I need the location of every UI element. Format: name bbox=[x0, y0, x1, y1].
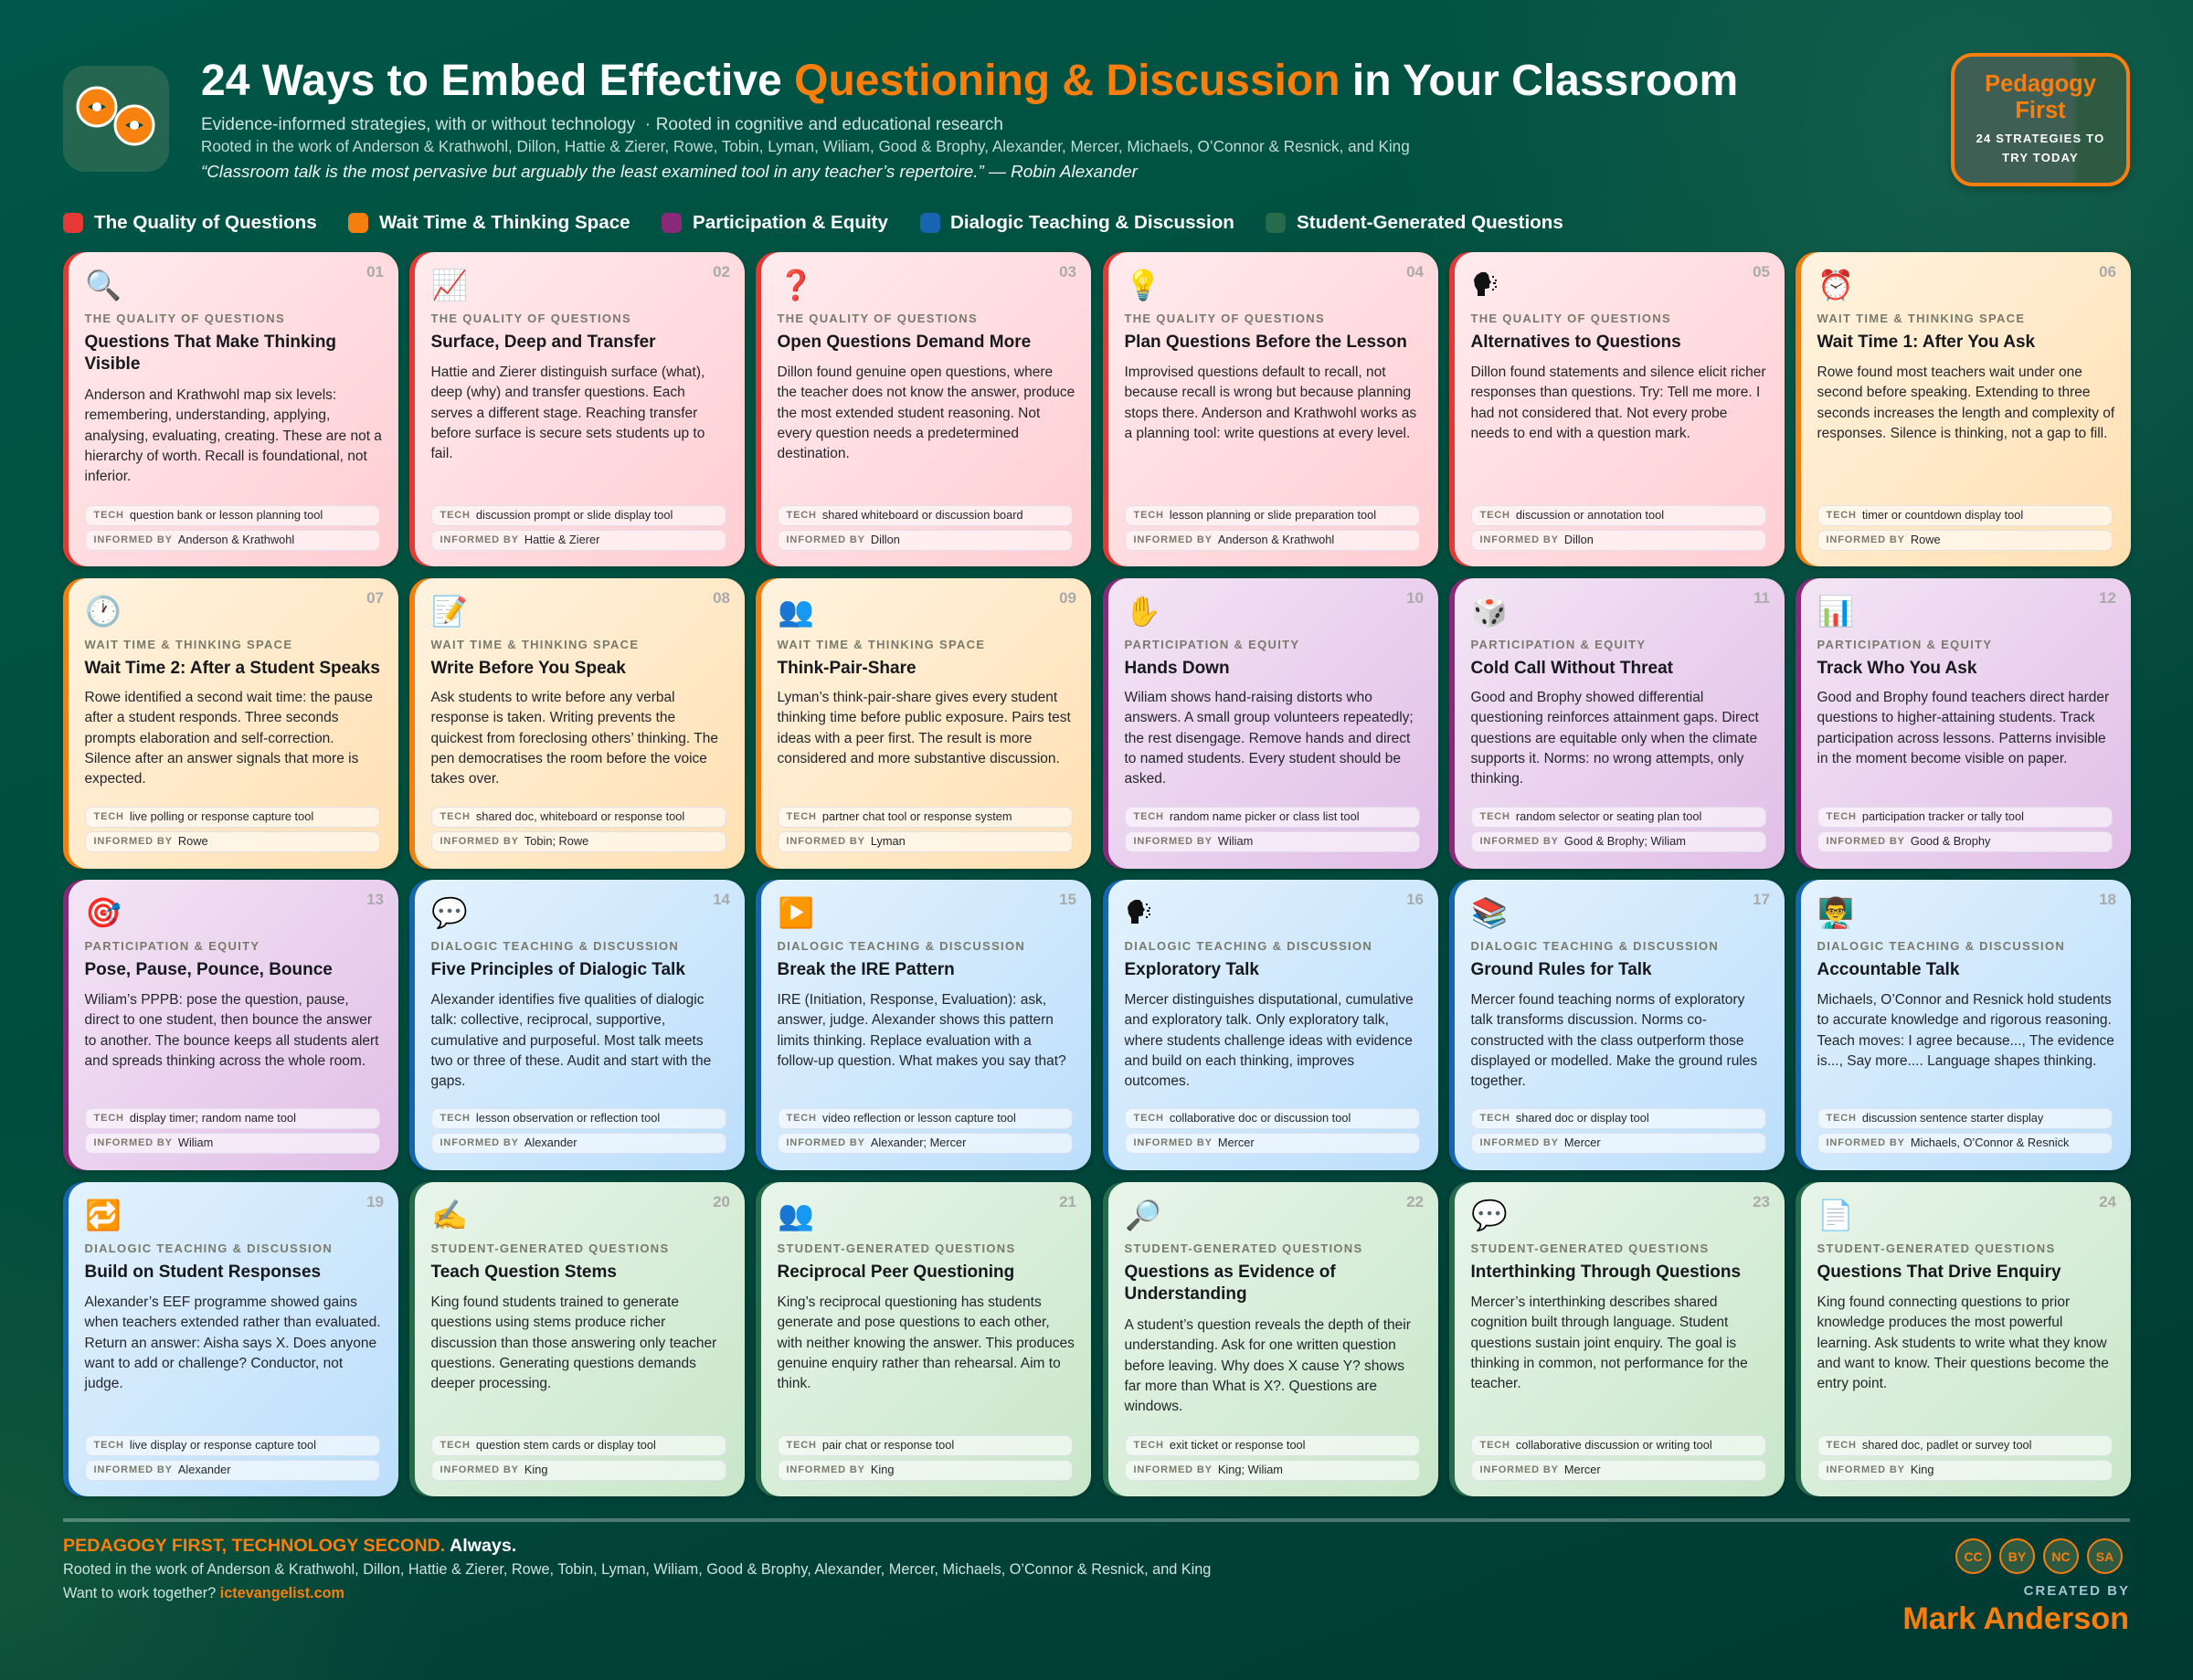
informed by pill bbox=[1817, 831, 2113, 852]
card body: Mercer found teaching norms of exploratory talk transforms discussion. Norms co-constructed with the class outperform those displayed or modelled. Make the ground rules together. bbox=[1471, 992, 1757, 1089]
informed by pill bbox=[777, 1460, 1073, 1481]
informed by pill: INFORMED BY Alexander; Mercer bbox=[786, 1136, 966, 1149]
category: DIALOGIC TEACHING & DISCUSSION bbox=[84, 1242, 333, 1255]
category: THE QUALITY OF QUESTIONS bbox=[777, 312, 978, 325]
informed by pill bbox=[1817, 530, 2113, 551]
card title: Break the IRE Pattern bbox=[777, 960, 955, 979]
subtitle: Evidence-informed strategies, with or without technology · Rooted in cognitive and educational research bbox=[201, 115, 1003, 134]
tech pill: TECH discussion or annotation tool bbox=[1480, 508, 1664, 522]
informed by pill: INFORMED BY King bbox=[440, 1463, 547, 1476]
category: DIALOGIC TEACHING & DISCUSSION bbox=[777, 939, 1025, 953]
informed by pill: INFORMED BY Michaels, O’Connor & Resnick bbox=[1826, 1136, 2069, 1149]
category: THE QUALITY OF QUESTIONS bbox=[1471, 312, 1671, 325]
logo icon: two orange eyes bbox=[63, 66, 169, 172]
card 23 bbox=[1449, 1182, 1785, 1496]
footer tagline: PEDAGOGY FIRST, TECHNOLOGY SECOND. Always. bbox=[63, 1536, 516, 1556]
card body: King’s reciprocal questioning has students generate and pose questions to each other, with neither knowing the answer. This produces genuine enquiry rather than rehearsal. Aim to think. bbox=[777, 1294, 1075, 1391]
number: 12 bbox=[2099, 589, 2116, 607]
tech pill: TECH shared doc, whiteboard or response tool bbox=[440, 809, 684, 823]
informed by pill bbox=[84, 831, 380, 852]
card body: Dillon found statements and silence elicit richer responses than questions. Try: Tell me more. I had not considered that. Not every probe needs to end with a question mark. bbox=[1471, 365, 1766, 441]
tech pill bbox=[431, 1108, 726, 1129]
tech pill: TECH display timer; random name tool bbox=[93, 1111, 296, 1125]
tech pill: TECH shared doc or display tool bbox=[1480, 1111, 1649, 1125]
number: 04 bbox=[1406, 263, 1424, 280]
category: WAIT TIME & THINKING SPACE bbox=[1817, 312, 2025, 325]
footer attribution: Rooted in the work of Anderson & Krathwohl, Dillon, Hattie & Zierer, Rowe, Tobin, Lyman, Wiliam, Good & Brophy, Alexander, Mercer, Michaels, O’Connor & Resnick, and King bbox=[63, 1561, 1211, 1578]
number: 22 bbox=[1406, 1193, 1424, 1210]
card title: Write Before You Speak bbox=[431, 659, 626, 678]
tech pill: TECH lesson observation or reflection tool bbox=[440, 1111, 660, 1125]
card title: Surface, Deep and Transfer bbox=[431, 333, 656, 352]
tech pill: TECH video reflection or lesson capture tool bbox=[786, 1111, 1016, 1125]
number: 17 bbox=[1753, 891, 1770, 908]
quote: “Classroom talk is the most pervasive but arguably the least examined tool in any teacher’s repertoire.” — Robin Alexander bbox=[201, 162, 1138, 181]
category: WAIT TIME & THINKING SPACE bbox=[777, 638, 985, 651]
card body: IRE (Initiation, Response, Evaluation): ask, answer, judge. Alexander shows this pattern limits thinking. Replace evaluation with a follow-up question. What makes you say that? bbox=[777, 992, 1066, 1069]
tech pill: TECH partner chat tool or response system bbox=[786, 809, 1012, 823]
category: THE QUALITY OF QUESTIONS bbox=[1124, 312, 1325, 325]
category: STUDENT-GENERATED QUESTIONS bbox=[431, 1242, 669, 1255]
card title: Build on Student Responses bbox=[84, 1263, 321, 1282]
card body: Wiliam’s PPPB: pose the question, pause, direct to one student, then bounce the answer to another. The bounce keeps all students alert and spreads thinking across the whole room. bbox=[84, 992, 378, 1069]
card title: Cold Call Without Threat bbox=[1471, 659, 1673, 678]
card title: Exploratory Talk bbox=[1124, 960, 1259, 979]
category: DIALOGIC TEACHING & DISCUSSION bbox=[1471, 939, 1719, 953]
informed by pill: INFORMED BY Rowe bbox=[1826, 533, 1941, 546]
informed by pill bbox=[431, 1133, 726, 1154]
card 07 bbox=[63, 578, 398, 869]
card title: Alternatives to Questions bbox=[1471, 333, 1681, 352]
card body: Mercer’s interthinking describes shared cognition built through language. Student questions sustain joint enquiry. The goal is thinking in common, not performance for the teacher. bbox=[1471, 1294, 1748, 1391]
badge subtext: 24 STRATEGIES TO bbox=[1976, 132, 2104, 145]
tech pill bbox=[1124, 807, 1420, 828]
number: 18 bbox=[2099, 891, 2116, 908]
card body: Rowe identified a second wait time: the pause after a student responds. Three seconds prompts elaboration and self-correction. Silence after an answer signals that more is expected. bbox=[84, 690, 373, 787]
card 04 bbox=[1103, 252, 1438, 566]
tech pill bbox=[84, 1108, 380, 1129]
tech pill bbox=[431, 1435, 726, 1456]
informed by pill: INFORMED BY Mercer bbox=[1133, 1136, 1255, 1149]
card 15 bbox=[756, 880, 1091, 1170]
informed by pill bbox=[84, 530, 380, 551]
informed by pill bbox=[777, 1133, 1073, 1154]
card title: Questions That Drive Enquiry bbox=[1817, 1263, 2061, 1282]
tech pill: TECH shared whiteboard or discussion board bbox=[786, 508, 1023, 522]
number: 10 bbox=[1406, 589, 1424, 607]
number: 11 bbox=[1753, 589, 1770, 607]
informed by pill bbox=[1471, 1460, 1765, 1481]
tech pill: TECH collaborative discussion or writing tool bbox=[1480, 1438, 1712, 1452]
footer contact: Want to work together? ictevangelist.com bbox=[63, 1585, 344, 1601]
informed by pill: INFORMED BY Anderson & Krathwohl bbox=[93, 533, 294, 546]
number: 14 bbox=[713, 891, 730, 908]
licence badge: CC: CC bbox=[1964, 1549, 1983, 1564]
badge heading: Pedagogy bbox=[1985, 71, 2096, 97]
card body: Hattie and Zierer distinguish surface (what), deep (why) and transfer questions. Each serves a different stage. Reaching transfer before surface is secure sets students up to fail. bbox=[431, 365, 705, 461]
category: WAIT TIME & THINKING SPACE bbox=[84, 638, 292, 651]
tech pill bbox=[777, 1435, 1073, 1456]
tech pill: TECH discussion prompt or slide display tool bbox=[440, 508, 673, 522]
card title: Accountable Talk bbox=[1817, 960, 1959, 979]
informed by pill: INFORMED BY Dillon bbox=[1480, 533, 1594, 546]
tech pill: TECH shared doc, padlet or survey tool bbox=[1826, 1438, 2032, 1452]
icon: teacher: 👨‍🏫 bbox=[1817, 896, 1854, 929]
icon: target: 🎯 bbox=[85, 896, 122, 929]
tech pill bbox=[431, 807, 726, 828]
informed by pill: INFORMED BY King bbox=[786, 1463, 894, 1476]
number: 05 bbox=[1753, 263, 1770, 280]
number: 08 bbox=[713, 589, 730, 607]
card body: Good and Brophy found teachers direct harder questions to higher-attaining students. Track participation across lessons. Patterns invisible in the moment become visible on paper. bbox=[1817, 690, 2109, 766]
informed by pill: INFORMED BY Wiliam bbox=[1133, 834, 1253, 848]
informed by pill: INFORMED BY Lyman bbox=[786, 834, 906, 848]
informed by pill bbox=[1471, 831, 1765, 852]
informed by pill: INFORMED BY Mercer bbox=[1480, 1463, 1601, 1476]
card 08 bbox=[409, 578, 745, 869]
licence badge: SA: SA bbox=[2096, 1549, 2114, 1564]
card 16 bbox=[1103, 880, 1438, 1170]
card 05 bbox=[1449, 252, 1785, 566]
informed by pill bbox=[1124, 1133, 1420, 1154]
icon: books: 📚 bbox=[1471, 896, 1508, 929]
licence badge: BY bbox=[1999, 1538, 2035, 1574]
badge heading: First bbox=[2015, 98, 2066, 123]
card body: Dillon found genuine open questions, where the teacher does not know the answer, produce the most extended student reasoning. Not every question needs a predetermined destination. bbox=[777, 365, 1075, 461]
card title: Hands Down bbox=[1124, 659, 1230, 678]
licence badge: SA bbox=[2087, 1538, 2123, 1574]
legend label: wait time: Wait Time & Thinking Space bbox=[379, 212, 630, 233]
informed by pill bbox=[431, 1460, 726, 1481]
tech pill bbox=[1471, 505, 1765, 526]
licence badge: BY: BY bbox=[2008, 1549, 2026, 1564]
card 24 bbox=[1796, 1182, 2131, 1496]
legend swatch: participation bbox=[662, 213, 682, 233]
icon: memo: 📝 bbox=[431, 595, 468, 628]
card title: Reciprocal Peer Questioning bbox=[777, 1263, 1014, 1282]
category: STUDENT-GENERATED QUESTIONS bbox=[1471, 1242, 1709, 1255]
card body: Good and Brophy showed differential questioning reinforces attainment gaps. Direct questions are equitable only when the climate supports it. Norms: no wrong attempts, only thinking. bbox=[1471, 690, 1759, 787]
research attribution line: Rooted in the work of Anderson & Krathwohl, Dillon, Hattie & Zierer, Rowe, Tobin, Lyman, Wiliam, Good & Brophy, Alexander, Mercer, Michaels, O’Connor & Resnick, and King bbox=[201, 137, 1410, 155]
icon: repeat: 🔁 bbox=[85, 1199, 122, 1231]
card 09 bbox=[756, 578, 1091, 869]
number: 02 bbox=[713, 263, 730, 280]
informed by pill: INFORMED BY Good & Brophy; Wiliam bbox=[1480, 834, 1686, 848]
informed by pill: INFORMED BY Good & Brophy bbox=[1826, 834, 1990, 848]
informed by pill: INFORMED BY Dillon bbox=[786, 533, 900, 546]
number: 13 bbox=[366, 891, 384, 908]
card body: Wiliam shows hand-raising distorts who answers. A small group volunteers repeatedly; the rest disengage. Remove hands and direct to named students. Every student should be asked. bbox=[1124, 690, 1414, 787]
legend swatch: wait time bbox=[348, 213, 368, 233]
tech pill bbox=[1471, 1435, 1765, 1456]
tech pill: TECH live polling or response capture tool bbox=[93, 809, 313, 823]
informed by pill bbox=[1124, 530, 1420, 551]
card 06 bbox=[1796, 252, 2131, 566]
informed by pill bbox=[84, 1460, 380, 1481]
tech pill: TECH question bank or lesson planning tool bbox=[93, 508, 323, 522]
card title: Open Questions Demand More bbox=[777, 333, 1031, 352]
icon: speech bubble: 💬 bbox=[431, 896, 468, 929]
category: THE QUALITY OF QUESTIONS bbox=[431, 312, 631, 325]
icon: bar chart: 📊 bbox=[1817, 595, 1854, 628]
informed by pill: INFORMED BY Alexander bbox=[440, 1136, 577, 1149]
licence badge: NC: NC bbox=[2051, 1549, 2071, 1564]
licence badge: CC bbox=[1955, 1538, 1991, 1574]
badge: Pedagogy First bbox=[1951, 53, 2130, 186]
informed by pill: INFORMED BY Rowe bbox=[93, 834, 208, 848]
informed by pill: INFORMED BY King; Wiliam bbox=[1133, 1463, 1283, 1476]
informed by pill bbox=[777, 831, 1073, 852]
informed by pill bbox=[431, 831, 726, 852]
card title: Track Who You Ask bbox=[1817, 659, 1976, 678]
informed by pill bbox=[1817, 1460, 2113, 1481]
informed by pill bbox=[431, 530, 726, 551]
tech pill: TECH lesson planning or slide preparation tool bbox=[1133, 508, 1376, 522]
number: 23 bbox=[1753, 1193, 1770, 1210]
number: 09 bbox=[1059, 589, 1076, 607]
badge heading bbox=[1985, 71, 2096, 123]
informed by pill: INFORMED BY Wiliam bbox=[93, 1136, 213, 1149]
card body: Lyman’s think-pair-share gives every student thinking time before public exposure. Pairs test ideas with a peer first. The result is more considered and more substantive discussion. bbox=[777, 690, 1071, 766]
card title: Pose, Pause, Pounce, Bounce bbox=[84, 960, 333, 979]
category: STUDENT-GENERATED QUESTIONS bbox=[777, 1242, 1015, 1255]
card 03 bbox=[756, 252, 1091, 566]
tech pill bbox=[1124, 505, 1420, 526]
number: 07 bbox=[366, 589, 384, 607]
icon: writing hand: ✍️ bbox=[431, 1199, 468, 1231]
card 11 bbox=[1449, 578, 1785, 869]
icon: speaking head bbox=[1128, 900, 1150, 924]
tech pill bbox=[777, 505, 1073, 526]
informed by pill: INFORMED BY King bbox=[1826, 1463, 1933, 1476]
card body: A student’s question reveals the depth of their understanding. Ask for one written question before leaving. Why does X cause Y? shows far more than What is X?. Questions are windows. bbox=[1124, 1317, 1411, 1414]
tech pill bbox=[1817, 1108, 2113, 1129]
number: 19 bbox=[366, 1193, 384, 1210]
icon: play button: ▶️ bbox=[778, 896, 814, 929]
tech pill bbox=[1124, 1108, 1420, 1129]
card 21 bbox=[756, 1182, 1091, 1496]
number: 06 bbox=[2099, 263, 2116, 280]
badge subtext bbox=[1976, 132, 2104, 164]
card body: Michaels, O’Connor and Resnick hold students to accurate knowledge and rigorous reasoning. Teach moves: I agree because..., The evidence is..., Say more.... Language shapes thinking. bbox=[1817, 992, 2114, 1069]
tech pill: TECH random selector or seating plan tool bbox=[1480, 809, 1701, 823]
icon: people: 👥 bbox=[778, 1199, 814, 1231]
category: DIALOGIC TEACHING & DISCUSSION bbox=[431, 939, 679, 953]
tech pill: TECH random name picker or class list tool bbox=[1133, 809, 1360, 823]
icon: dice: 🎲 bbox=[1471, 595, 1508, 628]
card body: King found connecting questions to prior knowledge produces the most powerful learning. Ask students to write what they know and want to know. Their questions become the entry point. bbox=[1817, 1294, 2109, 1391]
tech pill: TECH timer or countdown display tool bbox=[1826, 508, 2023, 522]
informed by pill: INFORMED BY Hattie & Zierer bbox=[440, 533, 599, 546]
card 17 bbox=[1449, 880, 1785, 1170]
created by label: CREATED BY bbox=[2024, 1583, 2130, 1599]
icon: raised hand: ✋ bbox=[1125, 595, 1161, 628]
tech pill bbox=[1124, 1435, 1420, 1456]
card title: Teach Question Stems bbox=[431, 1263, 617, 1282]
category: DIALOGIC TEACHING & DISCUSSION bbox=[1124, 939, 1372, 953]
number: 15 bbox=[1059, 891, 1076, 908]
card body: Alexander identifies five qualities of dialogic talk: collective, reciprocal, supportive, cumulative and purposeful. Most talk meets two or three of these. Audit and start with the gaps. bbox=[431, 992, 711, 1089]
informed by pill bbox=[1124, 1460, 1420, 1481]
legend swatch: student-generated bbox=[1266, 213, 1286, 233]
icon: speaking head bbox=[1474, 272, 1497, 296]
card 14 bbox=[409, 880, 745, 1170]
card body: Rowe found most teachers wait under one second before speaking. Extending to three seconds increases the length and complexity of responses. Silence is thinking, not a gap to fill. bbox=[1817, 365, 2114, 441]
category: STUDENT-GENERATED QUESTIONS bbox=[1817, 1242, 2055, 1255]
icon: clock: 🕐 bbox=[85, 595, 122, 628]
badge subtext: TRY TODAY bbox=[2002, 150, 2079, 164]
card title: Think-Pair-Share bbox=[777, 659, 916, 678]
card title: Ground Rules for Talk bbox=[1471, 960, 1652, 979]
number: 03 bbox=[1059, 263, 1076, 280]
informed by pill: INFORMED BY Mercer bbox=[1480, 1136, 1601, 1149]
tech pill bbox=[777, 807, 1073, 828]
tech pill bbox=[84, 505, 380, 526]
icon: speech bubble: 💬 bbox=[1471, 1199, 1508, 1231]
card title: Plan Questions Before the Lesson bbox=[1124, 333, 1407, 352]
informed by pill bbox=[1471, 1133, 1765, 1154]
category: PARTICIPATION & EQUITY bbox=[1471, 638, 1646, 651]
tech pill: TECH question stem cards or display tool bbox=[440, 1438, 656, 1452]
legend swatch: dialogic bbox=[920, 213, 940, 233]
number: 01 bbox=[366, 263, 384, 280]
card body: King found students trained to generate questions using stems produce richer discussion than those answering only teacher questions. Generating questions demands deeper processing. bbox=[431, 1294, 716, 1391]
informed by pill bbox=[777, 530, 1073, 551]
legend bbox=[63, 212, 1563, 233]
card 18 bbox=[1796, 880, 2131, 1170]
number: 20 bbox=[713, 1193, 730, 1210]
tech pill bbox=[84, 1435, 380, 1456]
licence badge: NC bbox=[2043, 1538, 2079, 1574]
card title: Questions as Evidence of Understanding bbox=[1124, 1263, 1336, 1304]
icon: chart: 📈 bbox=[431, 269, 468, 301]
icon: magnifier right: 🔎 bbox=[1125, 1199, 1161, 1231]
card 19 bbox=[63, 1182, 398, 1496]
tech pill: TECH collaborative doc or discussion tool bbox=[1133, 1111, 1351, 1125]
tech pill bbox=[1817, 807, 2113, 828]
tech pill bbox=[1817, 1435, 2113, 1456]
card 13 bbox=[63, 880, 398, 1170]
legend label: dialogic: Dialogic Teaching & Discussion bbox=[950, 212, 1234, 233]
card body: Alexander’s EEF programme showed gains when teachers extended rather than evaluated. Return an answer: Aisha says X. Does anyone want to add or challenge? Conductor, not judge. bbox=[84, 1294, 381, 1391]
number: 24 bbox=[2099, 1193, 2116, 1210]
card title: Wait Time 2: After a Student Speaks bbox=[84, 659, 380, 678]
legend label: participation: Participation & Equity bbox=[693, 212, 888, 233]
card title: Wait Time 1: After You Ask bbox=[1817, 333, 2035, 352]
card body: Improvised questions default to recall, not because recall is wrong but because planning stops there. Anderson and Krathwohl works as a planning tool: write questions at every level. bbox=[1124, 365, 1416, 441]
category: PARTICIPATION & EQUITY bbox=[1817, 638, 1992, 651]
number: 16 bbox=[1406, 891, 1424, 908]
author name: Mark Anderson bbox=[1902, 1601, 2129, 1636]
informed by pill bbox=[84, 1133, 380, 1154]
card title: Interthinking Through Questions bbox=[1471, 1263, 1741, 1282]
tech pill bbox=[431, 505, 726, 526]
tech pill: TECH participation tracker or tally tool bbox=[1826, 809, 2024, 823]
tech pill: TECH discussion sentence starter display bbox=[1826, 1111, 2043, 1125]
category: STUDENT-GENERATED QUESTIONS bbox=[1124, 1242, 1362, 1255]
icon: document: 📄 bbox=[1817, 1199, 1854, 1231]
category: THE QUALITY OF QUESTIONS bbox=[84, 312, 285, 325]
informed by pill: INFORMED BY Anderson & Krathwohl bbox=[1133, 533, 1334, 546]
card title: Five Principles of Dialogic Talk bbox=[431, 960, 685, 979]
tech pill: TECH live display or response capture tool bbox=[93, 1438, 316, 1452]
legend swatch: quality bbox=[63, 213, 83, 233]
icon: people: 👥 bbox=[778, 595, 814, 628]
card body: Mercer distinguishes disputational, cumulative and exploratory talk. Only exploratory talk, where students challenge ideas with evidence and build on each thinking, improves outcomes. bbox=[1124, 992, 1414, 1089]
tech pill bbox=[1817, 505, 2113, 526]
card body: Ask students to write before any verbal response is taken. Writing prevents the quickest from foreclosing others’ thinking. The pen democratises the room before the voice takes over. bbox=[431, 690, 718, 787]
category: PARTICIPATION & EQUITY bbox=[1124, 638, 1299, 651]
card body: Anderson and Krathwohl map six levels: remembering, understanding, applying, analysing, evaluating, creating. These are not a hierarchy of worth. Recall is foundational, not inferior. bbox=[84, 387, 382, 484]
card 20 bbox=[409, 1182, 745, 1496]
number: 21 bbox=[1059, 1193, 1076, 1210]
card 10 bbox=[1103, 578, 1438, 869]
informed by pill: INFORMED BY Tobin; Rowe bbox=[440, 834, 588, 848]
tech pill bbox=[1471, 807, 1765, 828]
card 01 bbox=[63, 252, 398, 566]
title: 24 Ways to Embed Effective Questioning & Discussion in Your Classroom bbox=[201, 57, 1738, 105]
tech pill bbox=[777, 1108, 1073, 1129]
card 22 bbox=[1103, 1182, 1438, 1496]
informed by pill bbox=[1124, 831, 1420, 852]
card 02 bbox=[409, 252, 745, 566]
legend label: quality: The Quality of Questions bbox=[94, 212, 317, 233]
icon: magnifier: 🔍 bbox=[85, 269, 122, 301]
legend label: student-generated: Student-Generated Questions bbox=[1297, 212, 1563, 233]
icon: question mark: ❓ bbox=[778, 269, 814, 301]
card title: Questions That Make Thinking Visible bbox=[84, 333, 336, 374]
category: WAIT TIME & THINKING SPACE bbox=[431, 638, 639, 651]
icon: light bulb: 💡 bbox=[1125, 269, 1161, 301]
card 12 bbox=[1796, 578, 2131, 869]
icon: alarm clock: ⏰ bbox=[1817, 269, 1854, 301]
tech pill bbox=[84, 807, 380, 828]
informed by pill bbox=[1471, 530, 1765, 551]
tech pill: TECH exit ticket or response tool bbox=[1133, 1438, 1306, 1452]
tech pill: TECH pair chat or response tool bbox=[786, 1438, 954, 1452]
category: PARTICIPATION & EQUITY bbox=[84, 939, 260, 953]
category: DIALOGIC TEACHING & DISCUSSION bbox=[1817, 939, 2065, 953]
tech pill bbox=[1471, 1108, 1765, 1129]
informed by pill bbox=[1817, 1133, 2113, 1154]
informed by pill: INFORMED BY Alexander bbox=[93, 1463, 230, 1476]
